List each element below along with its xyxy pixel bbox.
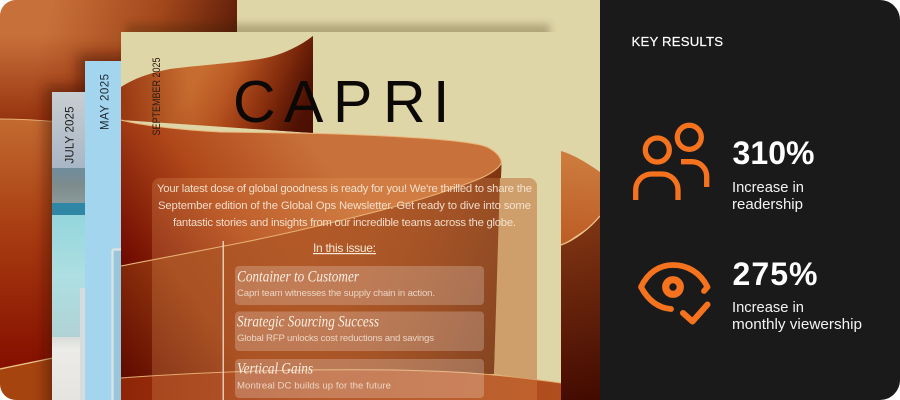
panel: back cover page — [0, 0, 600, 400]
intro text — [157, 183, 532, 229]
card: Strategic Sourcing Success: Strategic Sourcing Success — [237, 314, 379, 330]
inner card edge: May — [112, 250, 122, 400]
card: Strategic Sourcing Success: Global RFP unlocks cost reductions and savings — [237, 333, 434, 344]
ribbon: front curve — [121, 120, 502, 266]
stat: 275% monthly viewership — [732, 256, 862, 333]
stat: 275% monthly viewership: monthly viewership — [732, 317, 862, 333]
icon: people — [636, 125, 707, 200]
ribbon: dark reverse fold — [121, 163, 502, 380]
timeline rule — [222, 241, 224, 400]
title: CAPRI masthead: CAPRI — [233, 69, 449, 135]
card: Container to Customer — [235, 266, 484, 305]
panel: September 2025 issue — [121, 32, 600, 400]
card: Vertical Gains: Montreal DC builds up for the future — [237, 380, 391, 392]
heading: In this issue: In this issue: — [313, 241, 376, 255]
stat: 310% readership: Increase in — [732, 180, 804, 196]
panel: July 2025 issue — [52, 92, 86, 400]
ribbon: right edge — [561, 151, 600, 400]
card: Container to Customer: Container to Customer — [237, 268, 360, 286]
stat: 275% monthly viewership: Increase in — [732, 300, 804, 316]
label: July 2025: JULY 2025 — [64, 106, 76, 164]
panel: newsletter intro overlay — [152, 178, 537, 400]
shadow: behind newsletter pages — [45, 24, 550, 400]
card: Vertical Gains — [235, 359, 484, 398]
stat: 310% readership — [732, 135, 814, 213]
intro text: fantastic stories and insights from our incredible teams across the globe. — [173, 217, 516, 229]
heading: key results: KEY RESULTS — [632, 34, 723, 49]
stat: 310% readership: 310% — [732, 135, 814, 171]
icon: eye with check — [641, 265, 708, 322]
intro text: September edition of the Global Ops Newsletter. Get ready to dive into some — [158, 200, 531, 212]
card: Container to Customer: Capri team witnesses the supply chain in action. — [237, 288, 435, 299]
inner card edge: July — [80, 288, 85, 400]
label: May 2025: MAY 2025 — [100, 74, 112, 130]
stat: 275% monthly viewership: 275% — [732, 256, 818, 292]
ribbon: back curve behind masthead — [121, 36, 313, 133]
ribbon highlight edges — [121, 120, 502, 266]
card: Strategic Sourcing Success — [235, 312, 484, 351]
stat: 310% readership: readership — [732, 197, 803, 213]
panel: May 2025 issue — [85, 61, 122, 400]
ribbon: lower curve — [121, 370, 561, 400]
intro text: Your latest dose of global goodness is ready for you! We're thrilled to share the — [157, 183, 532, 195]
card: Vertical Gains: Vertical Gains — [237, 360, 313, 378]
panel: key results — [600, 0, 900, 400]
label: September 2025: SEPTEMBER 2025 — [151, 58, 163, 136]
